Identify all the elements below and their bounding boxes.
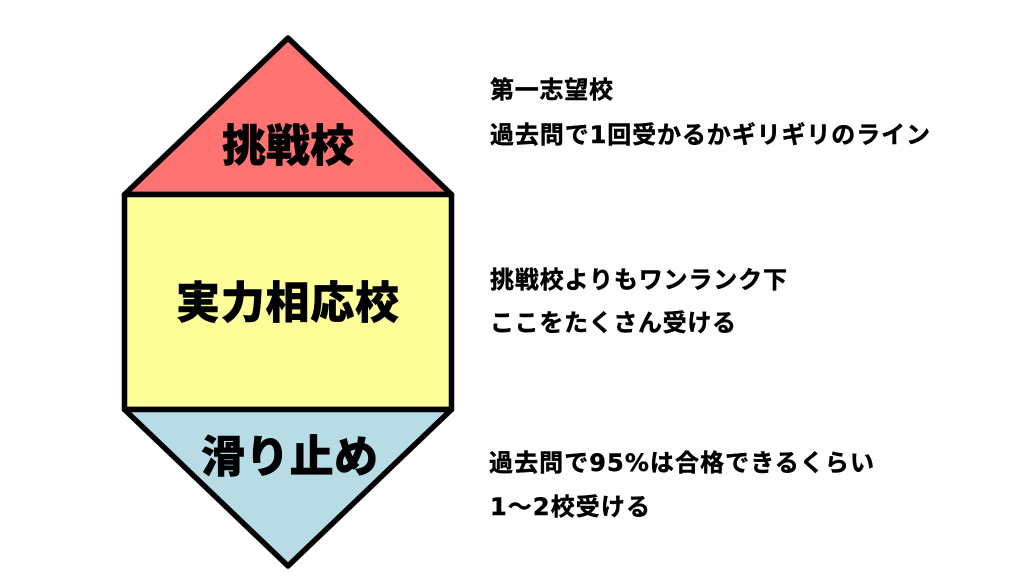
heading: challenge school: 挑戦校 [222, 122, 354, 171]
text block: challenge school description: 過去問で1回受かるかギリギリのライン [490, 121, 930, 149]
panel: challenge school triangle [124, 38, 452, 194]
text block: realistic school description: 挑戦校よりもワンランク下 [490, 267, 787, 294]
text block: realistic school description [490, 267, 787, 337]
text block: challenge school description [490, 77, 930, 149]
panel: safety school triangle [124, 410, 452, 566]
text block: realistic school description: ここをたくさん受ける [490, 310, 736, 337]
heading: safety school: 滑り止め [201, 433, 378, 482]
text block: safety school description: 1〜2校受ける [490, 493, 650, 521]
text block: challenge school description: 第一志望校 [490, 77, 613, 104]
panel: realistic school rectangle [124, 194, 452, 410]
text block: safety school description: 過去問で95%は合格できるくらい [489, 449, 874, 477]
diagram: school tiers hexagon [124, 38, 452, 566]
text block: safety school description [489, 449, 874, 521]
heading: realistic school: 実力相応校 [176, 279, 399, 328]
